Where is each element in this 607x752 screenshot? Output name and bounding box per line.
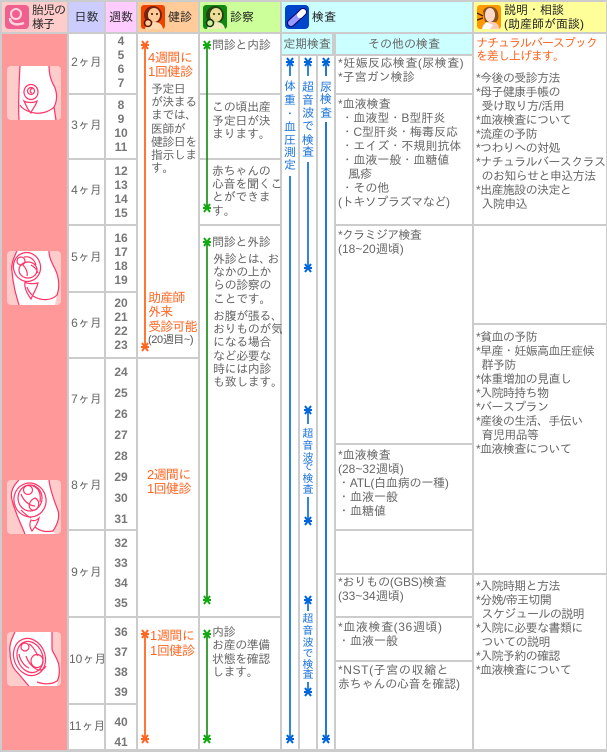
column: ultrasound: で	[302, 119, 314, 133]
cell: blood test 28-32	[336, 445, 472, 529]
cell: 7 and 8 months: 8ヶ月	[71, 478, 102, 492]
text: date instruction: 指示しま	[151, 148, 197, 162]
header: examination	[200, 2, 280, 32]
weeks 24-31: 28	[114, 449, 128, 463]
text: birth readiness: 状態を確認	[212, 652, 270, 666]
cell: blood tests: ・エイズ・不規則抗体	[341, 139, 461, 153]
header: checkup: 健診	[168, 10, 192, 24]
timeline: examination green	[203, 40, 211, 744]
text: date instruction: 健診日を	[151, 135, 197, 149]
cell: blood tests: 風疹	[348, 167, 372, 181]
label: every 2 weeks	[147, 467, 191, 496]
weeks 16-19: 19	[114, 273, 128, 287]
column: ultrasound: 波	[302, 637, 314, 649]
cell: blood tests: ・その他	[341, 181, 389, 195]
cell: 4 months	[69, 160, 104, 224]
weeks 12-15: 13	[114, 178, 128, 192]
subheader: regular tests: 定期検査	[283, 37, 331, 51]
cell: consultation late: *入院に必要な書類に	[476, 621, 583, 635]
column: ultrasound: 検	[302, 472, 314, 485]
cell: 3 months: 3ヶ月	[71, 118, 102, 132]
column: weight and blood pressure: 測	[284, 145, 296, 159]
cell: consultation late: スケジュールの説明	[481, 607, 584, 621]
icon: midwife	[477, 5, 501, 29]
callout: natural birth book: を差し上げます。	[476, 49, 564, 63]
cell: interview	[200, 34, 280, 93]
weeks 12-15: 12	[114, 164, 128, 178]
icon: fetus at 8 months	[7, 480, 61, 534]
column: ultrasound: 査	[302, 145, 314, 159]
weeks 32-35	[106, 531, 136, 616]
cell: NST: *NST(子宮の収縮と	[338, 663, 449, 677]
column: ultrasound: 検	[302, 658, 314, 671]
column: ultrasound: 検	[302, 133, 314, 147]
column: weight and blood pressure: 圧	[284, 133, 296, 147]
cell: blood test 36: ・血液一般	[338, 634, 398, 648]
label: midwife clinic: 外来	[148, 304, 172, 319]
label: every 4 weeks: 4週間に	[148, 50, 193, 65]
cell: 2 months	[69, 34, 104, 93]
cell: pregnancy test: *妊娠反応検査(尿検査)	[338, 56, 464, 70]
icon: doctor	[141, 5, 165, 29]
text: hear heartbeat: 心音を聞くこ	[212, 177, 282, 191]
weeks 12-15: 14	[114, 192, 128, 206]
text: hear heartbeat: す。	[212, 204, 235, 218]
cell: 6 months	[69, 293, 104, 357]
weeks 24-31: 24	[114, 365, 128, 379]
cell: GBS: *おりもの(GBS)検査	[338, 575, 446, 589]
weeks 24-31: 30	[114, 491, 128, 505]
label: every week	[150, 628, 195, 658]
column: urine test: 検	[320, 92, 332, 106]
cell: 3 months	[69, 95, 104, 158]
text: about external exam	[213, 252, 279, 306]
text: due date decided: まります。	[212, 127, 271, 141]
panel: checkup weekly	[138, 618, 198, 749]
cell: 9 months	[69, 531, 104, 616]
header: days: 日数	[74, 10, 98, 24]
cell: 11 months: 11ヶ月	[69, 719, 105, 733]
weeks 8-11: 8	[118, 98, 124, 112]
cell: 10 months	[69, 618, 104, 703]
cell: final exam	[200, 618, 280, 749]
text: due date decided: この頃出産	[212, 100, 271, 114]
cell: consultation late: *入院時期と方法	[476, 579, 560, 593]
cell: heartbeat	[200, 160, 280, 224]
cell: blood test 36	[336, 618, 472, 660]
cell: consultation middle: 育児用品等	[481, 428, 538, 442]
text: about external exam: らの診察の	[213, 278, 271, 292]
cell: consultation middle	[474, 325, 606, 573]
cell: 10 months: 10ヶ月	[69, 652, 106, 666]
cell: blood test 28-32: ・ATL(白血病の一種)	[338, 476, 449, 490]
text: interview and internal exam: 問診と内診	[212, 38, 271, 52]
cell: GBS	[336, 575, 472, 616]
cell: blood test 28-32: (28~32週頃)	[338, 462, 404, 476]
cell: consultation middle: *早産・妊娠高血圧症候	[476, 344, 594, 358]
weeks 24-31: 26	[114, 407, 128, 421]
weeks 36-39: 37	[114, 645, 128, 659]
list: early topics: *血液検査について	[476, 113, 571, 127]
weeks 4-7: 6	[118, 62, 124, 76]
cell: consultation late: ついての説明	[481, 635, 550, 649]
text: birth readiness: します。	[212, 665, 258, 679]
cell: 2 months: 2ヶ月	[71, 55, 102, 69]
column: ultrasound: 音	[302, 93, 314, 107]
cell: NST	[336, 662, 472, 749]
cell: consultation late	[474, 575, 606, 749]
text: date instruction: までは、	[151, 108, 197, 122]
header: days	[69, 2, 104, 32]
cell: consultation middle: *産後の生活、手伝い	[476, 414, 583, 428]
cell: 4 months: 4ヶ月	[71, 183, 102, 197]
cell: consultation middle: 群予防	[481, 358, 516, 372]
panel: checkup every 4 weeks	[138, 34, 198, 357]
text: hear heartbeat: とができま	[212, 190, 271, 204]
cell: 9 months: 9ヶ月	[71, 565, 102, 579]
cell: blood tests: ・血液一般・血糖値	[341, 153, 449, 167]
cell: blood tests: ・血液型・B型肝炎	[341, 111, 445, 125]
header: weeks	[106, 2, 136, 32]
label: every 4 weeks	[148, 50, 193, 79]
text: birth readiness: お産の準備	[212, 638, 270, 652]
list: early topics: *ナチュラルバースクラス	[476, 155, 605, 169]
weeks 40-41	[106, 705, 136, 749]
text: birth readiness	[212, 625, 270, 679]
text: date instruction	[151, 82, 197, 175]
weeks 32-35: 34	[114, 576, 128, 590]
text: internal exam note: お腹が張る、	[213, 309, 283, 323]
weeks 36-39: 36	[114, 625, 128, 639]
weeks 16-19	[106, 226, 136, 291]
weeks 24-31: 29	[114, 470, 128, 484]
cell: due date	[200, 95, 280, 158]
weeks 4-7: 4	[118, 34, 124, 48]
weeks 20-23: 22	[114, 324, 128, 338]
subheader: regular tests	[282, 34, 332, 54]
cell: NST: 赤ちゃんの心音を確認)	[338, 677, 460, 691]
header: examination: 診察	[230, 10, 254, 24]
label: every 2 weeks: 2週間に	[147, 467, 191, 482]
list: early topics: 受け取り方/活用	[481, 99, 564, 113]
weeks 20-23: 20	[114, 296, 128, 310]
weeks 24-31: 27	[114, 428, 128, 442]
cell: 11 months	[69, 705, 104, 749]
column: ultrasound: 波	[302, 452, 314, 464]
cell: empty	[474, 226, 606, 323]
list: early topics: *出産施設の決定と	[476, 183, 571, 197]
column: weight and blood pressure: 体	[284, 79, 296, 93]
header: tests	[282, 2, 472, 32]
weeks 24-31: 31	[114, 512, 128, 526]
weeks 36-39: 38	[114, 665, 128, 679]
icon: fetus at 10 months	[7, 632, 61, 686]
panel: checkup every 2 weeks	[138, 359, 198, 616]
cell: blood test 28-32: *血液検査	[338, 448, 391, 462]
column: ultrasound: 音	[302, 625, 314, 637]
weeks 16-19: 18	[114, 259, 128, 273]
weeks 20-23	[106, 293, 136, 357]
text: date instruction: 医師が	[151, 122, 185, 136]
cell: 5 months: 5ヶ月	[71, 250, 102, 264]
cell: 5 months	[69, 226, 104, 291]
list: early topics: *流産の予防	[476, 127, 537, 141]
column: ultrasound: 音	[302, 440, 314, 452]
column: ultrasound	[300, 56, 316, 749]
cell: consultation early	[474, 34, 606, 224]
cell: consultation middle: *入院時持ち物	[476, 386, 548, 400]
cell: blood test 28-32: ・血糖値	[338, 504, 386, 518]
column: urine test	[318, 56, 334, 749]
cell: pregnancy test	[336, 56, 472, 93]
weeks 32-35: 35	[114, 596, 128, 610]
cell: blood test 36: *血液検査(36週頃)	[338, 620, 443, 634]
subheader: other tests: その他の検査	[368, 37, 440, 51]
header: consultation: (助産師が面談)	[504, 17, 584, 31]
weeks 40-41: 41	[114, 735, 128, 749]
text: hear heartbeat	[212, 164, 282, 218]
cell: blood test 28-32: ・血液一般	[338, 490, 398, 504]
text: about external exam: なかの上か	[213, 265, 271, 279]
text: internal exam note: おりものが気	[213, 322, 283, 336]
timeline: weekly	[141, 629, 149, 744]
weeks 8-11: 11	[115, 140, 127, 154]
weeks 40-41: 40	[114, 715, 128, 729]
header: checkup	[138, 2, 198, 32]
icon: fetus at 2 months	[7, 66, 61, 120]
column: weight and blood pressure: ・	[284, 107, 296, 121]
cell: consultation middle: *貧血の予防	[476, 330, 537, 344]
list: early topics: *つわりへの対処	[476, 141, 560, 155]
cell: 7 and 8 months	[69, 359, 104, 529]
weeks 20-23: 23	[114, 338, 128, 352]
column: ultrasound: 超	[302, 80, 314, 94]
label: midwife clinic	[148, 290, 197, 334]
column: ultrasound: で	[302, 648, 314, 660]
list: early topics	[476, 71, 605, 211]
column: weight and blood pressure	[282, 56, 298, 749]
header: consultation: 説明・相談	[504, 3, 564, 17]
weeks 32-35: 33	[114, 556, 128, 570]
header: weeks: 週数	[109, 10, 133, 24]
cell: chlamydia: *クラミジア検査	[338, 228, 421, 242]
weeks 36-39: 39	[114, 685, 128, 699]
header: tests: 検査	[312, 10, 336, 24]
cell: blood tests: (トキソプラズマなど)	[338, 195, 450, 209]
text: due date decided	[212, 100, 271, 141]
header: fetus state: 胎児の	[32, 3, 65, 17]
label: every week: 1回健診	[150, 643, 195, 658]
label: every week: 1週間に	[150, 628, 195, 643]
cell: consultation late: *血液検査について	[476, 663, 571, 677]
column: ultrasound: で	[302, 461, 314, 473]
cell: empty	[336, 531, 472, 573]
icon: doctor green	[203, 5, 227, 29]
header: consultation	[474, 2, 606, 32]
text: internal exam note: 時には内診	[213, 362, 271, 376]
column: ultrasound: 超	[302, 613, 314, 625]
subheader: other tests	[336, 34, 472, 54]
cell: 6 months: 6ヶ月	[71, 316, 102, 330]
list: early topics: *今後の受診方法	[476, 71, 560, 85]
cell: GBS: (33~34週頃)	[338, 589, 404, 603]
cell: consultation late: *入院予約の確認	[476, 649, 560, 663]
column: ultrasound: 超	[302, 428, 314, 440]
weeks 8-11: 10	[114, 126, 128, 140]
cell: blood tests	[336, 95, 472, 224]
text: date instruction: す。	[151, 161, 174, 175]
weeks 24-31: 25	[114, 386, 128, 400]
callout: natural birth book	[476, 36, 597, 63]
icon: test tube	[285, 5, 309, 29]
cell: 7 and 8 months: 7ヶ月	[71, 392, 102, 406]
cell: consultation middle: *血液検査について	[476, 442, 571, 456]
cell: blood tests: ・C型肝炎・梅毒反応	[341, 125, 458, 139]
list: early topics: のお知らせと申込方法	[481, 169, 595, 183]
header: fetus state: 様子	[32, 17, 54, 31]
column: ultrasound: 波	[302, 106, 314, 120]
weeks 36-39	[106, 618, 136, 703]
column: weight and blood pressure: 血	[284, 120, 296, 134]
weeks 4-7: 5	[118, 48, 124, 62]
text: due date decided: 予定日が決	[212, 114, 271, 128]
note: from week 20: (20週目~)	[148, 334, 193, 346]
weeks 16-19: 17	[114, 245, 128, 259]
weeks 16-19: 16	[114, 231, 128, 245]
panel: fetus illustrations	[2, 34, 67, 750]
weeks 4-7: 7	[118, 76, 124, 90]
cell: consultation middle: *体重増加の見直し	[476, 372, 571, 386]
text: date instruction: 予定日	[151, 82, 185, 96]
cell: consultation late: *分娩/帝王切開	[476, 593, 551, 607]
column: ultrasound: 査	[302, 484, 314, 496]
cell: consultation middle: *バースプラン	[476, 400, 548, 414]
label: midwife clinic: 受診可能	[148, 319, 197, 334]
text: internal exam note: など必要な	[213, 349, 271, 363]
text: birth readiness: 内診	[212, 625, 235, 639]
cell: external exam	[200, 226, 280, 616]
weeks 8-11	[106, 95, 136, 158]
icon: fetus	[5, 5, 29, 29]
cell: blood tests: *血液検査	[338, 97, 391, 111]
icon: fetus at 5 months	[7, 251, 61, 305]
list: early topics: *母子健康手帳の	[476, 85, 560, 99]
text: internal exam note: になる場合	[213, 335, 271, 349]
weeks 4-7	[106, 34, 136, 93]
weeks 20-23: 21	[114, 310, 128, 324]
weeks 12-15	[106, 160, 136, 224]
column: urine test: 尿	[320, 80, 332, 94]
text: about external exam: 外診とは、お	[213, 252, 279, 266]
label: midwife clinic: 助産師	[148, 290, 185, 305]
weeks 32-35: 32	[114, 536, 128, 550]
timeline: 4 weeks	[141, 40, 149, 352]
text: internal exam note: も致します。	[213, 375, 283, 389]
column: ultrasound: 査	[302, 669, 314, 681]
label: every 2 weeks: 1回健診	[147, 480, 191, 496]
cell: chlamydia: (18~20週頃)	[338, 242, 404, 256]
list: early topics: 入院申込	[481, 197, 527, 211]
column: weight and blood pressure: 重	[284, 93, 296, 107]
column: urine test: 査	[320, 106, 332, 120]
weeks 8-11: 9	[118, 112, 124, 126]
weeks 12-15: 15	[114, 206, 128, 220]
column: weight and blood pressure: 定	[284, 158, 296, 172]
callout: natural birth book: ナチュラルバースブック	[476, 36, 597, 50]
text: hear heartbeat: 赤ちゃんの	[212, 164, 271, 178]
text: internal exam note	[213, 309, 283, 389]
text: interview and external exam: 問診と外診	[212, 235, 271, 249]
cell: chlamydia	[336, 226, 472, 443]
label: every 4 weeks: 1回健診	[148, 64, 193, 79]
weeks 24-31	[106, 359, 136, 529]
text: date instruction: が決まる	[151, 95, 197, 109]
header: fetus state	[2, 2, 67, 32]
cell: pregnancy test: *子宮ガン検診	[338, 70, 415, 84]
text: about external exam: ことです。	[213, 292, 271, 306]
